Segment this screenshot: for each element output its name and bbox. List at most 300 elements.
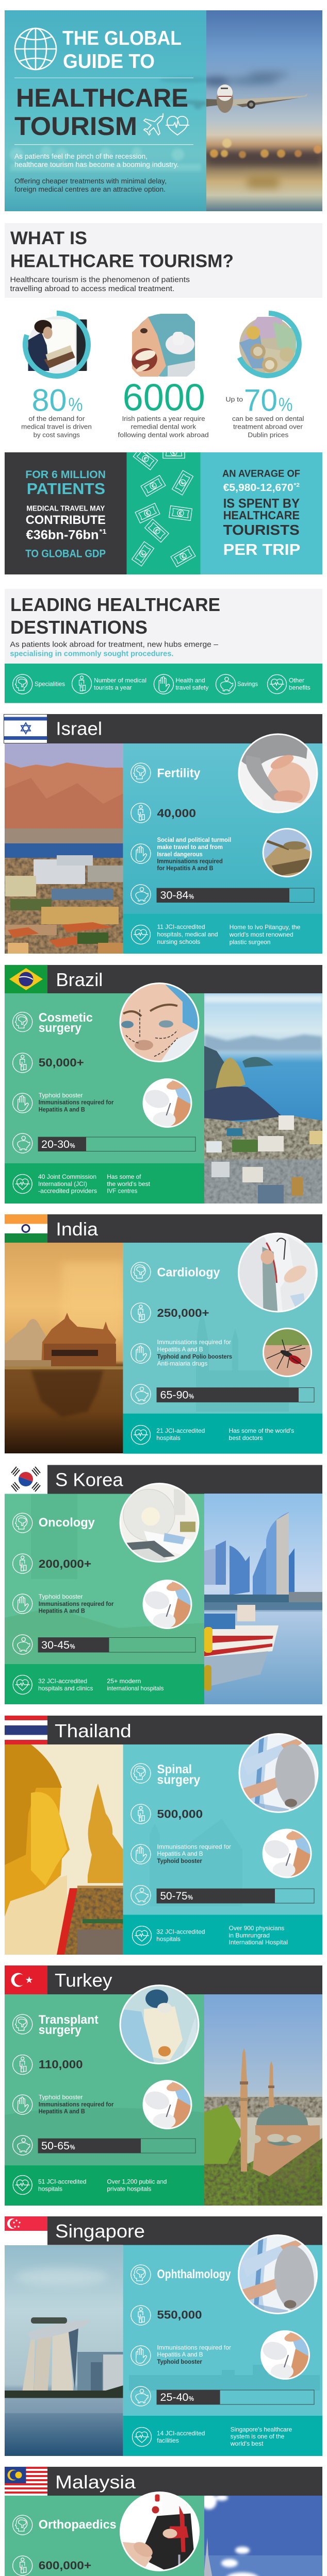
row: other benefits: IVF centres <box>107 1187 137 1194</box>
row: other benefits: hospitals <box>156 1935 181 1942</box>
row: safety: Immunisations required for <box>39 1098 114 1106</box>
flag: India <box>5 1214 47 1243</box>
row: savings bar: % <box>70 1642 75 1650</box>
icons: euro notes: € <box>140 551 146 557</box>
spending text: AN AVERAGE OF <box>222 469 300 479</box>
ring: 70 percent <box>239 313 299 376</box>
icons: euro notes <box>132 446 195 567</box>
row: tourists: 550,000 <box>157 2308 202 2321</box>
row: safety: Hepatitis A and B <box>157 1850 203 1857</box>
benefits band <box>5 2165 204 2206</box>
hero ghost photo overlay <box>10 77 211 171</box>
photo: pregnant belly <box>237 732 319 815</box>
row: other benefits: private hospitals <box>107 2185 151 2193</box>
spending text: TOURISTS <box>223 522 300 538</box>
header bar <box>47 2216 322 2245</box>
benefits band <box>123 1914 322 1955</box>
country name: Turkey <box>55 1970 112 1991</box>
benefits band <box>5 1163 204 1204</box>
row: safety: Immunisations required for <box>157 1338 231 1346</box>
section: S Korea <box>5 1465 322 1704</box>
row: speciality: Transplant <box>39 2013 99 2027</box>
row: safety: Immunisations required for <box>157 2344 231 2351</box>
row: savings bar: 65-90 <box>160 1389 189 1401</box>
row: savings bar: 50-75 <box>160 1890 188 1902</box>
title: the global guide to <box>62 27 182 73</box>
caption: of the demand for <box>28 415 85 422</box>
row: safety: Israel dangerous <box>157 851 203 858</box>
row: other benefits: world's most renowned <box>229 931 293 938</box>
row: other benefits: best doctors <box>229 1434 263 1442</box>
icons: euro notes: € <box>142 455 148 462</box>
country name: Malaysia <box>55 2471 136 2493</box>
row: savings bar: 30-84 <box>160 889 189 902</box>
flag: Brazil <box>5 965 47 993</box>
title: the global guide to: THE GLOBAL <box>62 27 182 49</box>
row: speciality: surgery <box>39 1021 81 1035</box>
row: other benefits <box>132 2426 292 2447</box>
country name: Thailand <box>55 1720 132 1741</box>
icon: aeroplane <box>144 113 163 135</box>
row: other benefits: the world's best <box>107 1180 151 1188</box>
intro text <box>10 640 219 658</box>
row: speciality <box>131 1262 220 1282</box>
row: other benefits: Has some of the world's <box>229 1427 294 1434</box>
legend: health and travel safety <box>154 674 208 694</box>
legend: specialities: Specialities <box>35 680 65 687</box>
section: India <box>5 1214 322 1454</box>
row: safety: Social and political turmoil <box>157 836 231 843</box>
row: safety: Hepatitis A and B <box>157 2351 203 2358</box>
section: Singapore <box>5 2216 322 2456</box>
row: safety <box>13 1593 114 1615</box>
spending text: IS SPENT BY <box>223 497 300 511</box>
row: tourists: 200,000+ <box>39 1557 91 1570</box>
legend: other benefits: Other <box>289 677 304 684</box>
row: savings bar: % <box>189 1392 194 1400</box>
icon: heart with pulse <box>166 116 189 135</box>
city photo: Golden Temple <box>5 1243 124 1453</box>
row: other benefits: -accredited providers <box>38 1187 97 1194</box>
section: Malaysia <box>5 2467 322 2576</box>
row: tourists <box>131 1804 203 1824</box>
icons: euro notes: € <box>179 480 187 486</box>
row: other benefits: Over 1,200 public and <box>107 2178 167 2185</box>
row: speciality: Ophthalmology <box>157 2267 231 2281</box>
panel: leading healthcare destinations <box>5 589 322 664</box>
row: savings bar <box>131 1384 314 1404</box>
hero paragraph: foreign medical centres are an attractive option. <box>14 185 166 193</box>
title: the global guide to: GUIDE TO <box>63 50 155 73</box>
heading: DESTINATIONS <box>10 617 148 638</box>
flag: Singapore <box>5 2216 47 2245</box>
stat: 80 percent <box>21 313 92 439</box>
city photo: Rio <box>204 993 322 1204</box>
GDP text: €36bn-76bn <box>26 528 99 542</box>
photo: tank <box>261 827 313 878</box>
row: safety: Hepatitis A and B <box>39 1607 85 1615</box>
title: healthcare tourism: TOURISM <box>14 112 137 141</box>
flag: South Korea <box>5 1465 47 1494</box>
info panel <box>123 1744 322 1914</box>
photo: vaccination <box>141 2079 193 2130</box>
photo: CT scanner <box>118 1482 201 1564</box>
icons: euro notes: € <box>145 510 151 517</box>
row: other benefits: in Bumrungrad <box>229 1932 270 1939</box>
legend band <box>5 664 322 703</box>
row: other benefits: 32 JCI-accredited <box>38 1677 87 1685</box>
caption: can be saved on dental <box>232 415 304 422</box>
row: savings bar: % <box>189 2395 194 2402</box>
legend: health and travel safety: travel safety <box>175 684 208 691</box>
section: Turkey <box>5 1965 322 2206</box>
row: speciality <box>131 1762 201 1787</box>
row: other benefits: International (JCI) <box>38 1180 87 1188</box>
row: other benefits: 11 JCI-accredited <box>157 923 205 930</box>
row: other benefits: 40 Joint Commission <box>38 1173 96 1180</box>
row: other benefits: plastic surgeon <box>230 939 270 946</box>
row: safety <box>131 1843 231 1865</box>
info panel <box>123 743 322 914</box>
row: other benefits <box>13 2175 167 2195</box>
heading <box>10 594 220 638</box>
row: savings bar: % <box>70 2143 75 2151</box>
caption: treatment abroad over <box>233 422 303 431</box>
country name: Singapore <box>55 2221 145 2242</box>
row: safety <box>131 836 231 872</box>
legend: savings <box>216 674 258 694</box>
caption: Irish patients a year require <box>122 415 205 422</box>
legend: number of tourists: tourists a year <box>94 684 132 691</box>
row: savings bar <box>13 1133 195 1153</box>
figure: up to 70%: Up to <box>226 396 243 403</box>
row: speciality <box>13 1513 95 1533</box>
GDP text: *1 <box>99 528 106 535</box>
intro text: specialising in commonly sought procedures. <box>10 649 173 658</box>
photo: mosquito <box>261 1327 313 1378</box>
flag: Israel <box>4 715 47 743</box>
row: speciality <box>131 763 201 783</box>
panel: spending per trip <box>200 452 322 574</box>
benefits band <box>123 1414 322 1454</box>
photo: surgeon <box>118 1984 201 2066</box>
row: other benefits: hospitals, medical and <box>157 930 218 938</box>
row: other benefits: hospitals and clinics <box>38 1685 93 1692</box>
icon: globe <box>15 28 56 70</box>
row: speciality: surgery <box>39 2023 81 2037</box>
stat: up to 70 percent <box>226 313 304 439</box>
hero paragraph: As patients feel the pinch of the recession, <box>14 152 148 160</box>
row: safety <box>131 1338 232 1367</box>
photo: cardiologist <box>236 1231 319 1314</box>
row: safety: make travel to and from <box>157 843 223 851</box>
flag: Thailand <box>5 1716 47 1744</box>
header bar <box>47 1965 322 1994</box>
row: other benefits: nursing schools <box>157 938 200 945</box>
row: other benefits: 14 JCI-accredited <box>157 2430 205 2437</box>
header bar <box>4 714 322 743</box>
row: tourists <box>13 1053 84 1073</box>
legend: number of tourists: Number of medical <box>94 677 146 684</box>
icons: euro notes: € <box>153 528 160 534</box>
caption <box>118 415 209 439</box>
row: savings bar <box>13 2136 195 2155</box>
header bar <box>47 1465 322 1494</box>
row: safety: Immunisations required for <box>39 1600 114 1607</box>
header bar <box>47 965 322 993</box>
info panel <box>5 1494 204 1664</box>
row: other benefits: system is one of the <box>231 2433 285 2440</box>
ring: 80 percent <box>25 313 88 376</box>
section: Brazil <box>5 965 322 1204</box>
caption: following dental work abroad <box>118 431 209 439</box>
row: speciality <box>131 2265 231 2284</box>
faint background silhouette <box>150 1819 242 1906</box>
stat: 6000 patients <box>118 314 209 439</box>
GDP text: CONTRIBUTE <box>26 513 106 527</box>
row: safety: Typhoid booster <box>157 1857 202 1865</box>
row: safety: Typhoid booster <box>39 1092 83 1099</box>
heading: LEADING HEALTHCARE <box>10 594 220 615</box>
spending text: HEALTHCARE <box>223 509 300 522</box>
row: savings bar <box>131 885 314 904</box>
row: speciality: Cosmetic <box>39 1011 93 1025</box>
caption: by cost savings <box>34 431 80 439</box>
row: safety: Hepatitis A and B <box>157 1346 203 1353</box>
row: other benefits <box>131 923 301 946</box>
faint background silhouette <box>5 2108 204 2165</box>
info panel <box>123 1243 322 1414</box>
row: other benefits: International Hospital <box>229 1939 288 1946</box>
photo: vaccination <box>261 1828 313 1879</box>
row: savings bar <box>13 1635 195 1654</box>
row: speciality: Fertility <box>157 767 201 780</box>
spending text: PER TRIP <box>223 540 300 558</box>
photo: cosmetic surgery face <box>118 981 201 1063</box>
row: other benefits: world's best <box>230 2440 264 2447</box>
row: tourists: 500,000 <box>157 1807 203 1821</box>
icons: euro notes: € <box>172 450 175 456</box>
panel: hero <box>5 10 322 211</box>
row: other benefits: 51 JCI-accredited <box>38 2178 86 2185</box>
benefits band <box>5 1664 204 1704</box>
row: other benefits <box>13 1675 164 1694</box>
caption: remedial dental work <box>131 422 197 431</box>
faint background silhouette <box>196 1309 289 1412</box>
row: safety: Hepatitis A and B <box>39 1106 85 1113</box>
row: speciality <box>13 2515 117 2535</box>
hero paragraph <box>14 152 178 193</box>
heading: WHAT IS <box>10 228 87 248</box>
hero paragraph: Offering cheaper treatments with minimal delay, <box>14 177 167 185</box>
info panel <box>5 993 204 1163</box>
row: safety: for Hepatitis A and B <box>157 865 214 872</box>
row: tourists: 40,000 <box>157 807 196 820</box>
flag: Malaysia <box>5 2467 47 2496</box>
row: tourists <box>131 803 196 823</box>
row: safety <box>131 2344 231 2365</box>
country name: Brazil <box>56 969 103 990</box>
photo: vaccination <box>259 2329 311 2381</box>
legend: health and travel safety: Health and <box>175 677 205 684</box>
photo: dental patient <box>129 314 195 377</box>
photo: crutches <box>119 2490 201 2573</box>
city photo <box>5 743 123 954</box>
caption: Dublin prices <box>248 431 289 439</box>
definition text <box>10 275 190 293</box>
row: safety: Immunisations required for <box>157 1843 231 1851</box>
photo: traveller reading <box>28 316 87 374</box>
row: other benefits: Singapore's healthcare <box>231 2426 292 2433</box>
row: tourists <box>13 2055 83 2074</box>
GDP text: PATIENTS <box>27 480 105 498</box>
row: safety: Typhoid booster <box>157 2358 202 2365</box>
caption: medical travel is driven <box>21 422 92 431</box>
row: tourists: 600,000+ <box>39 2559 91 2572</box>
row: savings bar: 20-30 <box>41 1139 70 1150</box>
row: other benefits: Has some of <box>107 1173 141 1180</box>
row: speciality: Cardiology <box>157 1265 220 1280</box>
photo: spine examination <box>237 1732 320 1815</box>
row: speciality: Oncology <box>39 1516 95 1530</box>
row: savings bar: % <box>189 892 194 901</box>
figure: 80%: % <box>68 394 83 415</box>
city photo: mosque <box>204 1994 322 2206</box>
row: safety: Typhoid booster <box>39 2094 83 2101</box>
row: other benefits: hospitals <box>156 1434 181 1442</box>
icons: euro notes: € <box>151 483 156 490</box>
benefits band <box>123 914 322 954</box>
row: safety: Immunisations required <box>157 857 223 865</box>
row: savings bar: 30-45 <box>41 1639 70 1651</box>
legend: other benefits: benefits <box>289 684 310 691</box>
row: other benefits: 25+ modern <box>107 1677 141 1685</box>
hero paragraph: healthcare tourism has become a booming industry. <box>14 161 178 168</box>
row: tourists <box>131 1303 209 1323</box>
legend: number of tourists <box>72 674 146 693</box>
city photo: Kuala Lumpur <box>201 2493 322 2576</box>
city photo: Busan harbour <box>204 1494 322 1704</box>
info panel <box>5 1994 204 2165</box>
section: Israel <box>4 714 322 954</box>
heading <box>10 228 234 271</box>
caption <box>232 415 304 439</box>
title: healthcare tourism: HEALTHCARE <box>16 83 188 112</box>
row: safety <box>13 2094 114 2115</box>
legend: other benefits <box>267 675 310 693</box>
icons: euro notes: € <box>181 553 186 561</box>
legend: savings: Savings <box>237 680 258 687</box>
legend: specialities <box>13 674 65 694</box>
GDP text: FOR 6 MILLION <box>25 469 106 481</box>
country name: S Korea <box>55 1469 124 1490</box>
heading: HEALTHCARE TOURISM? <box>10 251 234 271</box>
figure: 80% <box>32 383 83 417</box>
spending text: *2 <box>294 482 300 488</box>
row: safety: Typhoid booster <box>39 1593 83 1600</box>
row: other benefits: 32 JCI-accredited <box>156 1928 205 1935</box>
row: tourists <box>13 1554 91 1573</box>
row: other benefits <box>132 1925 288 1946</box>
icons: euro notes: € <box>178 511 183 517</box>
section: Thailand <box>5 1716 322 1955</box>
row: speciality <box>13 1011 93 1035</box>
panel: global GDP contribution <box>5 452 127 574</box>
spending text <box>222 469 300 558</box>
row: tourists <box>13 2556 91 2575</box>
row: savings bar: % <box>70 1142 75 1149</box>
flag: Turkey <box>5 1965 47 1994</box>
photo: vaccination <box>141 1077 193 1129</box>
hero photo: plane at dusk <box>202 10 322 211</box>
faint background silhouette <box>129 2365 320 2391</box>
row: savings bar <box>131 2386 314 2406</box>
figure: up to 70%: 70 <box>244 383 277 417</box>
row: speciality <box>13 2013 99 2037</box>
photo: vaccination <box>141 1579 193 1630</box>
figure: 6000: 6000 <box>123 377 205 418</box>
figure: up to 70%: % <box>279 394 293 415</box>
spending text: €5,980-12,670 <box>223 482 293 494</box>
country name: Israel <box>56 718 102 739</box>
row: other benefits: 21 JCI-accredited <box>156 1427 205 1434</box>
hero teal panel <box>5 10 206 211</box>
row: savings bar <box>131 1886 314 1905</box>
row: speciality: Orthopaedics <box>39 2518 117 2532</box>
row: tourists <box>131 2306 202 2325</box>
info panel <box>5 2496 204 2576</box>
city photo: Buddha statues <box>5 1744 123 1955</box>
city photo: Marina Bay <box>5 2245 124 2456</box>
row: safety: Immunisations required for <box>39 2101 114 2108</box>
row: other benefits: facilities <box>157 2437 179 2444</box>
GDP text <box>25 469 106 560</box>
row: speciality: Spinal <box>157 1762 192 1776</box>
row: speciality: surgery <box>157 1773 201 1787</box>
definition text: Healthcare tourism is the phenomenon of patients <box>10 275 190 284</box>
photo: euro notes and coins <box>239 317 296 374</box>
benefits band <box>123 2416 322 2456</box>
row: other benefits: Home to Ivo Pitanguy, the <box>230 923 301 930</box>
row: tourists: 250,000+ <box>157 1307 209 1319</box>
faint background silhouette <box>5 1494 204 1664</box>
title: healthcare tourism <box>14 83 188 141</box>
intro text: As patients look abroad for treatment, new hubs emerge – <box>10 640 219 649</box>
row: other benefits: international hospitals <box>107 1685 164 1692</box>
row: savings bar: 25-40 <box>160 2392 189 2403</box>
row: other benefits <box>13 1173 151 1194</box>
photo: eye consultation <box>236 2233 319 2315</box>
header bar <box>47 1716 322 1744</box>
figure: 80%: 80 <box>32 383 67 417</box>
caption <box>21 415 92 439</box>
row: safety: Anti-malaria drugs <box>157 1360 207 1367</box>
row: safety: Typhoid and Polio boosters <box>157 1353 232 1360</box>
row: other benefits <box>131 1425 294 1445</box>
header bar <box>47 1214 322 1243</box>
info panel <box>123 2245 322 2416</box>
row: other benefits: Over 900 physicians <box>229 1925 284 1932</box>
GDP text: TO GLOBAL GDP <box>25 548 106 560</box>
row: tourists: 50,000+ <box>39 1056 84 1069</box>
row: safety <box>13 1092 114 1113</box>
row: savings bar: % <box>188 1893 193 1901</box>
row: tourists: 110,000 <box>39 2058 83 2071</box>
GDP text: MEDICAL TRAVEL MAY <box>26 504 105 513</box>
figure: up to 70% <box>226 383 293 417</box>
country name: India <box>56 1218 99 1240</box>
row: safety: Hepatitis A and B <box>39 2108 85 2115</box>
